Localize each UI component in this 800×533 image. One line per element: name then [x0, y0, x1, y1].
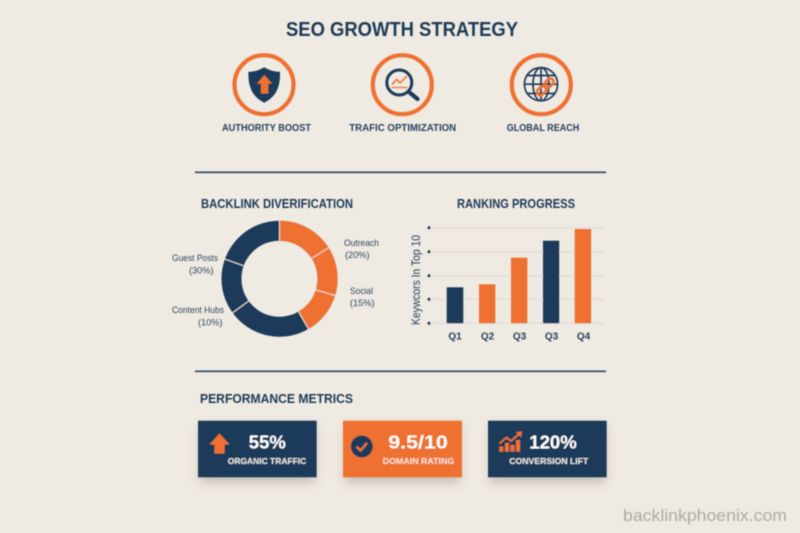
icon: growth chart: [499, 432, 522, 452]
icon: global link: [512, 55, 571, 114]
donut labels: (15%): [350, 298, 375, 308]
donut chart: [225, 221, 335, 329]
donut labels: Outreach: [344, 238, 379, 248]
donut labels: (10%): [198, 318, 223, 328]
card: domain rating: 9.5/10: [388, 432, 448, 452]
heading: backlink diverification: BACKLINK DIVERIFICATION: [201, 197, 353, 211]
donut labels: (20%): [345, 250, 370, 260]
donut labels: (30%): [189, 266, 214, 276]
bar chart: ranking progress: Q1: [448, 332, 462, 342]
icon: authority shield: [234, 55, 294, 114]
bar chart: ranking progress: Q4: [577, 332, 591, 342]
card: organic traffic: [198, 421, 317, 482]
card: conversion lift: CONVERSION LIFT: [509, 456, 589, 466]
bar chart: ranking progress: Q2: [481, 332, 495, 342]
label: global reach: GLOBAL REACH: [507, 122, 579, 134]
card: domain rating: [343, 421, 462, 482]
icon: traffic magnifier: [373, 55, 432, 114]
icon: check badge: [351, 436, 373, 458]
card: organic traffic: 55%: [249, 432, 286, 452]
donut labels: Guest Posts: [172, 253, 218, 263]
donut labels: Social: [350, 286, 373, 296]
heading: performance metrics: PERFORMANCE METRICS: [200, 392, 353, 406]
watermark: backlinkphoenix.com: [623, 506, 787, 525]
bar chart: ranking progress: Q3: [545, 332, 559, 342]
bar chart: ranking progress: Q3: [513, 332, 527, 342]
bar chart: ranking progress: [411, 226, 604, 342]
heading: ranking progress: RANKING PROGRESS: [457, 197, 575, 211]
card: domain rating: DOMAIN RATING: [383, 456, 455, 466]
donut labels: Content Hubs: [172, 305, 224, 315]
card: organic traffic: ORGANIC TRAFFIC: [228, 456, 306, 466]
card: conversion lift: [488, 421, 607, 482]
icon: up arrow: [210, 434, 230, 454]
card: conversion lift: 120%: [529, 432, 577, 452]
label: authority boost: AUTHORITY BOOST: [222, 122, 312, 134]
bar chart: ranking progress: Keywcors In Top 10: [411, 235, 423, 325]
title: SEO GROWTH STRATEGY: [286, 19, 519, 41]
donut labels: [172, 238, 379, 328]
label: trafic optimization: TRAFIC OPTIMIZATION: [349, 122, 456, 134]
panel: top feature icons: [222, 55, 579, 134]
